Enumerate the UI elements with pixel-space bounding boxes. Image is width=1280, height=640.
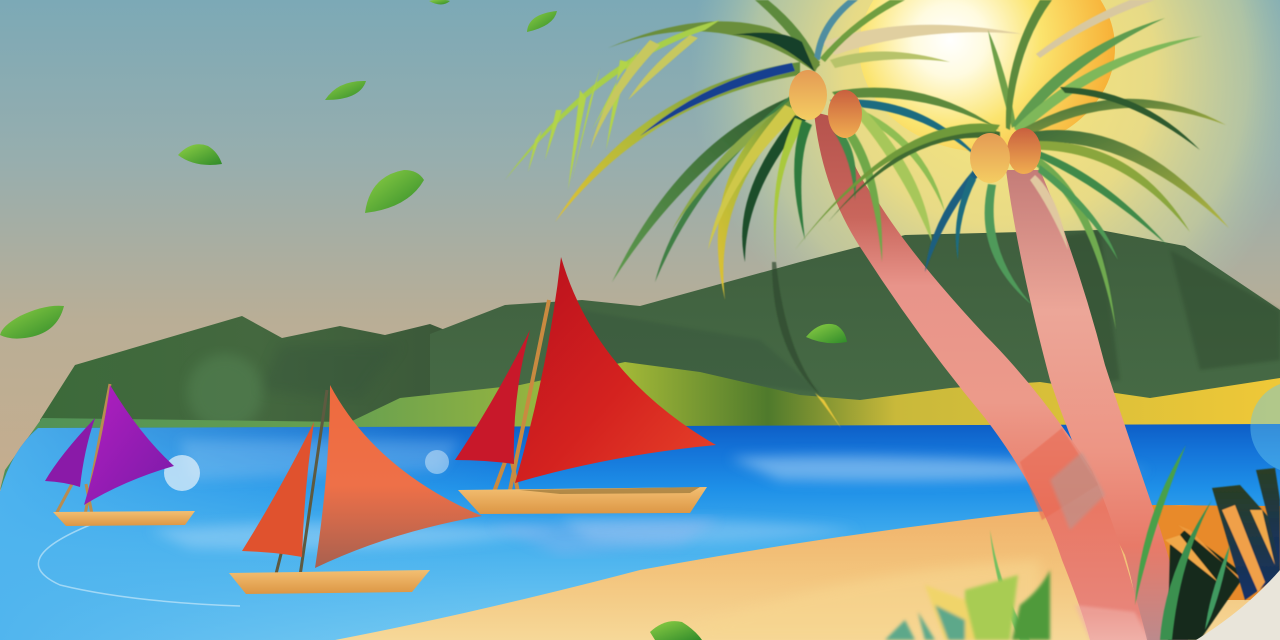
mountains	[40, 230, 1280, 430]
sun with glow	[690, 0, 1280, 380]
leaf 5	[365, 170, 424, 213]
palm tree right: trunk	[1006, 170, 1188, 640]
palm fronds: right tree	[795, 0, 1229, 330]
leaf 4	[178, 144, 222, 165]
boat: red sails	[455, 257, 716, 514]
leaf 1	[429, 0, 450, 4]
water	[0, 424, 1280, 640]
leaf 8	[650, 621, 702, 640]
leaf 3	[325, 81, 366, 100]
leaf 2	[527, 11, 557, 32]
palm tree left: trunk	[814, 112, 1147, 640]
sparkle circles	[164, 384, 1280, 491]
sand beach	[335, 505, 1280, 640]
wake curve	[38, 525, 240, 606]
shoreline hills	[0, 362, 1280, 490]
leaf 6	[0, 306, 64, 339]
foreground plants: bottom yellow-green leaves	[885, 570, 1050, 640]
leaf 7	[806, 324, 847, 343]
foreground plants: grass blades	[990, 445, 1230, 640]
foreground plants: bottom right dark leaves	[1165, 468, 1280, 640]
boat: purple sails	[45, 384, 195, 526]
boat: orange sails	[229, 385, 482, 594]
water highlights	[150, 440, 1150, 550]
sail reflection	[490, 518, 720, 555]
off-white corner	[1196, 570, 1280, 640]
palm fronds: left tree	[505, 0, 1022, 428]
coconuts	[789, 70, 1041, 183]
